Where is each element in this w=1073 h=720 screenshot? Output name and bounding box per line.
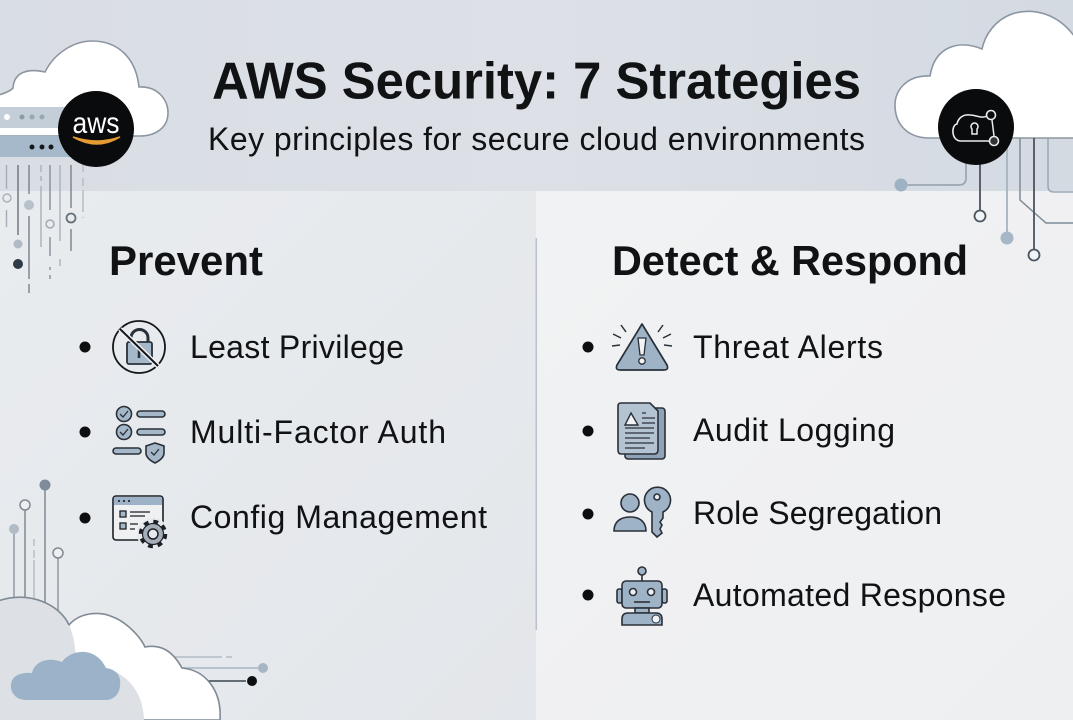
icon: AWS badge <box>58 91 134 167</box>
item: Least Privilege <box>80 321 404 373</box>
icon: robot <box>617 567 667 625</box>
icon: no lock <box>113 321 165 373</box>
panel: header band <box>0 0 1073 191</box>
item: Config Management: Config Management <box>190 499 487 535</box>
item: Multi-Factor Auth: Multi-Factor Auth <box>190 414 446 450</box>
subtitle: Key principles for secure cloud environments <box>208 121 865 157</box>
illustration: top-left cloud with server and AWS badge <box>0 41 168 293</box>
icon: AWS badge: aws <box>72 107 120 140</box>
item: Audit Logging <box>582 403 895 459</box>
panel: Prevent background <box>0 191 536 720</box>
illustration: top-right cloud with circuit lines and lock badge <box>894 11 1073 260</box>
heading: Prevent: Prevent <box>109 237 263 284</box>
icon: audit documents <box>618 403 665 459</box>
item: Threat Alerts: Threat Alerts <box>693 329 883 365</box>
icon: checklist with shield <box>113 406 165 463</box>
item: Least Privilege: Least Privilege <box>190 329 404 365</box>
icon: cloud lock badge <box>938 89 1014 165</box>
item: Automated Response <box>582 567 1006 625</box>
item: Role Segregation <box>582 487 942 537</box>
item: Multi-Factor Auth <box>80 406 446 463</box>
title: AWS Security: 7 Strategies <box>212 52 861 110</box>
item: Role Segregation: Role Segregation <box>693 495 942 531</box>
icon: window with gear <box>113 496 169 550</box>
heading: Detect & Respond: Detect & Respond <box>612 237 968 284</box>
item: Audit Logging: Audit Logging <box>693 412 895 448</box>
illustration: bottom-left clouds with circuit lines <box>0 480 268 720</box>
item: Threat Alerts <box>582 324 883 370</box>
panel: Detect and Respond background <box>536 191 1073 720</box>
icon: warning triangle <box>612 324 672 370</box>
item: Automated Response: Automated Response <box>693 577 1006 613</box>
icon: user and key <box>614 487 670 537</box>
item: Config Management <box>80 496 487 550</box>
